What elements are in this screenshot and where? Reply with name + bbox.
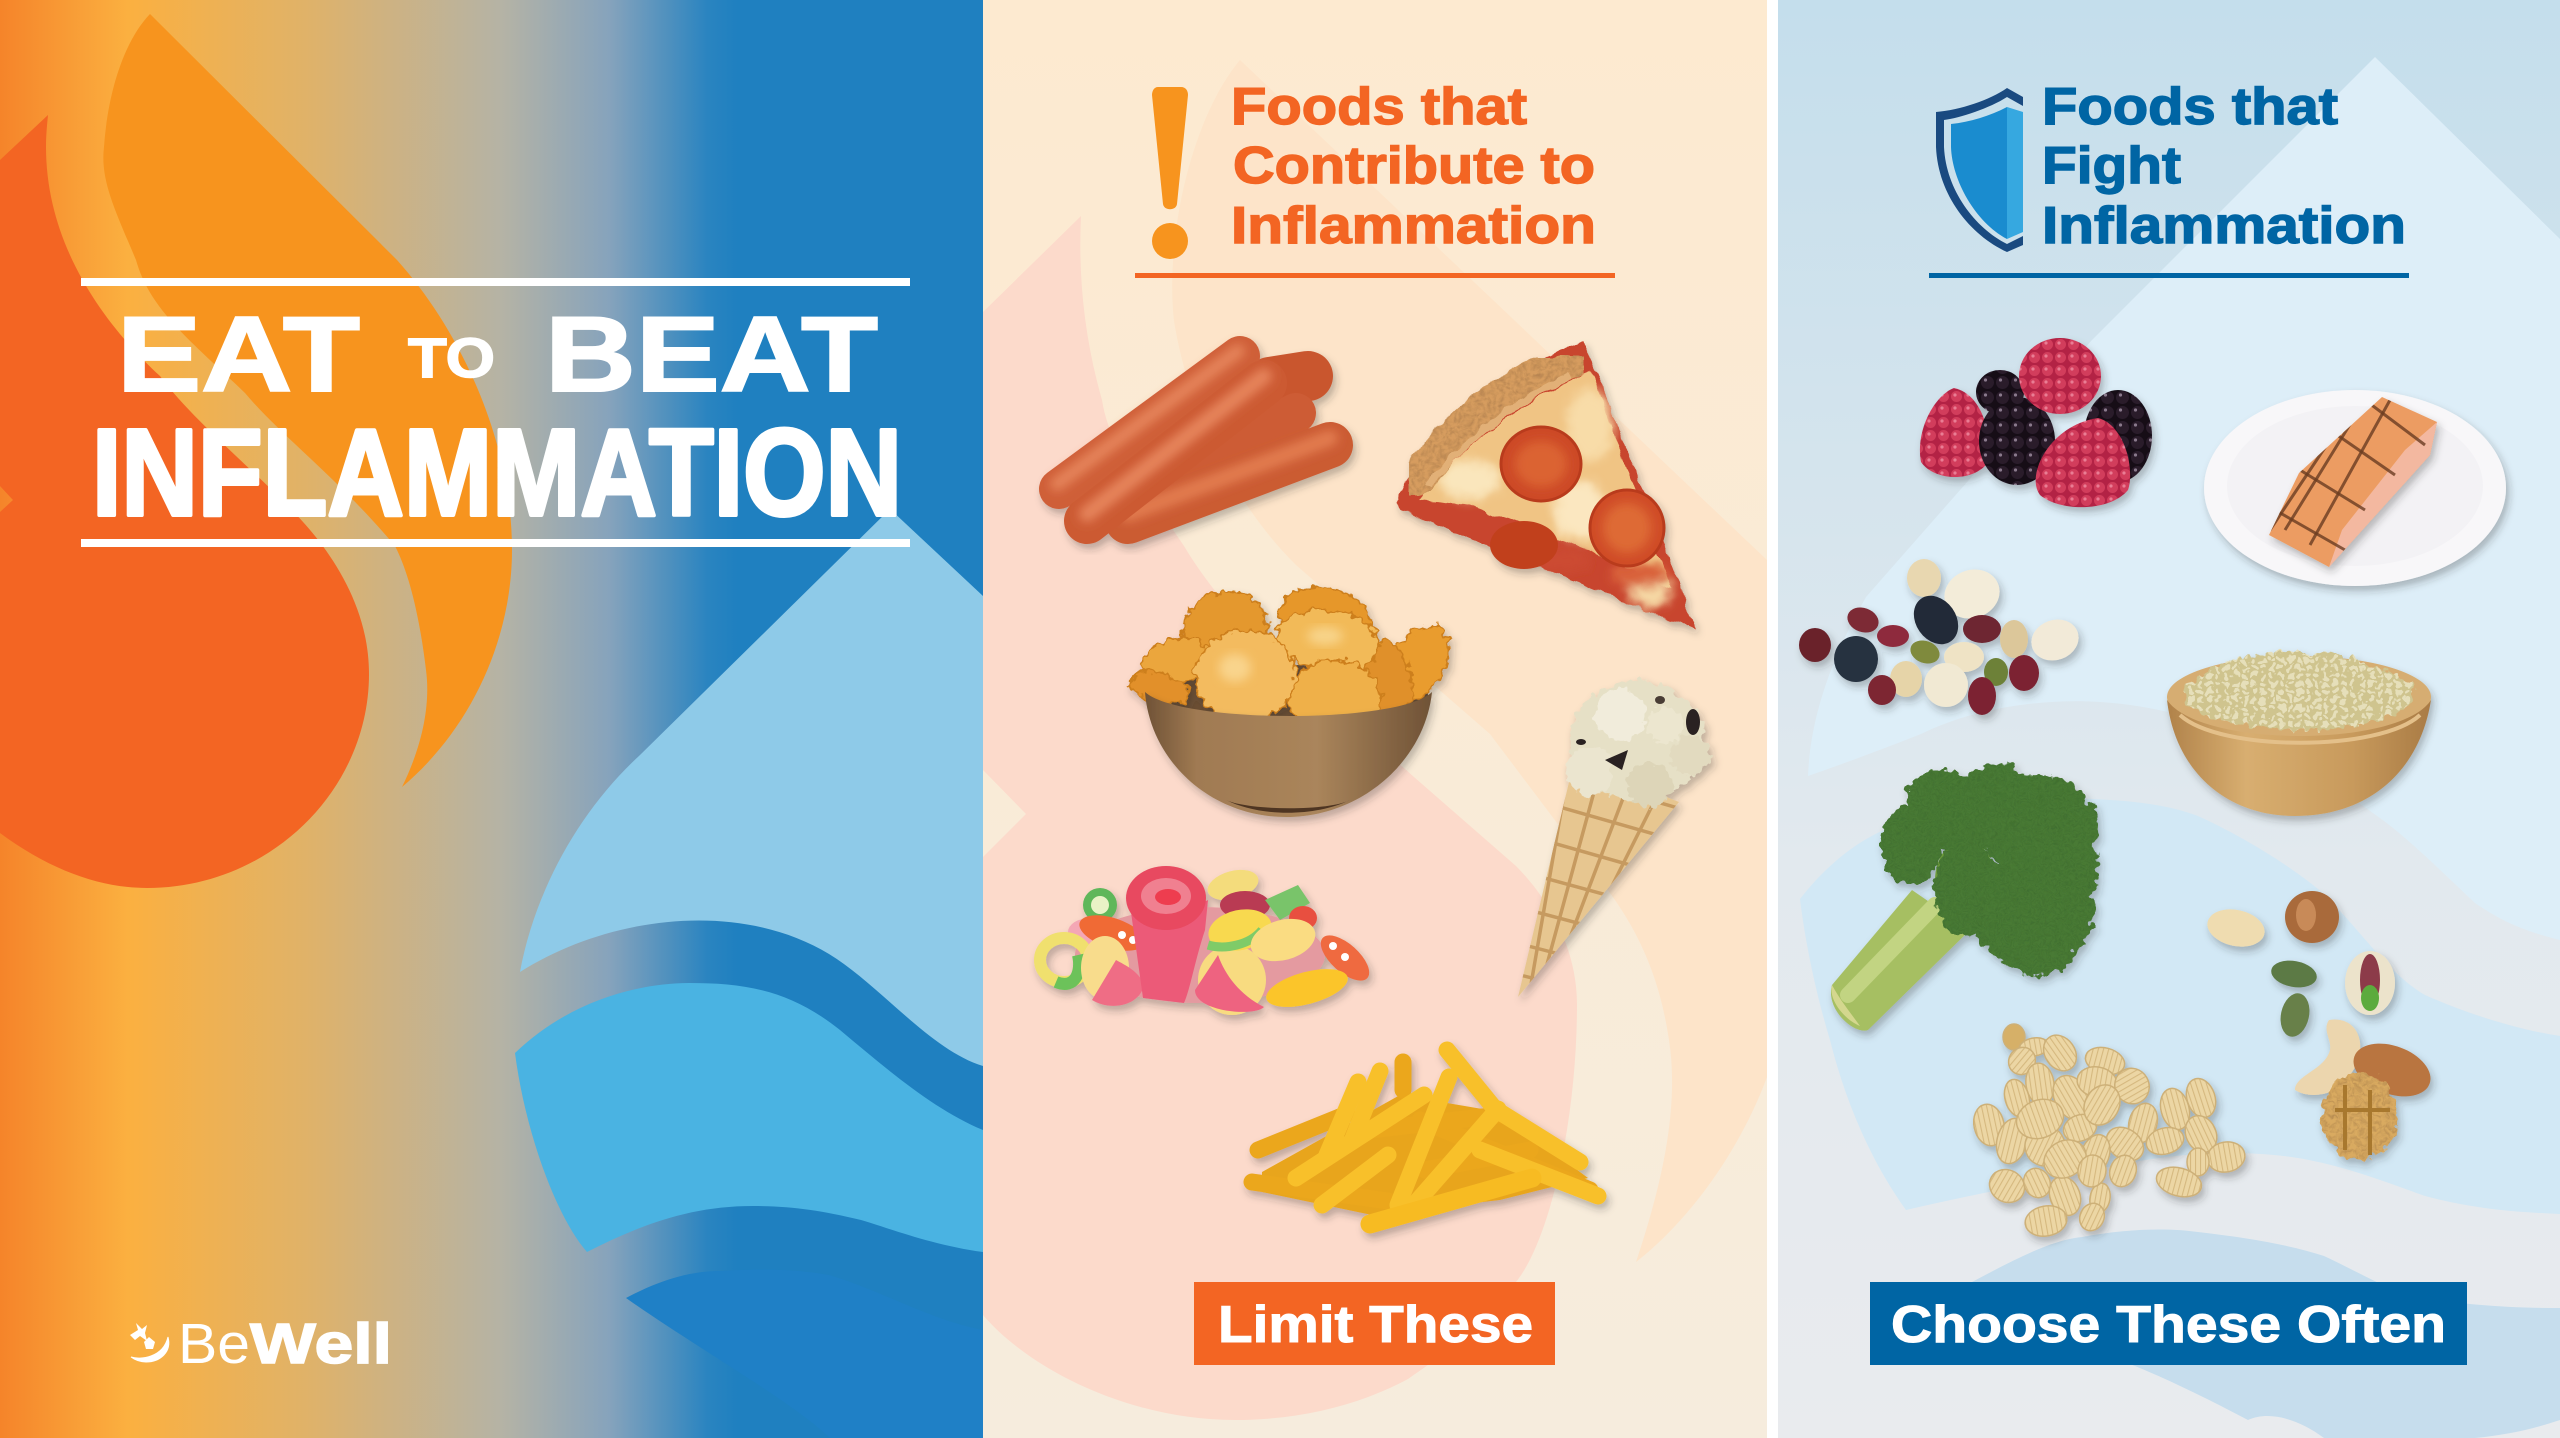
salmon fillet	[2269, 397, 2437, 567]
logo icon	[130, 1323, 169, 1362]
heading: foods that fight	[2042, 78, 2406, 255]
BeWell logo	[130, 1321, 388, 1364]
food: ice cream cone	[1500, 681, 1720, 1000]
heading: foods that fight: Fight	[2042, 137, 2181, 195]
food: broccoli	[1831, 764, 2099, 1031]
heading: foods that contribute: Contribute to	[1233, 137, 1595, 195]
food: gummy candy	[1040, 865, 1377, 1015]
panel: foods that fight inflammation	[1778, 0, 2560, 1438]
dark blue wave	[626, 1272, 715, 1356]
orange flame	[103, 14, 512, 787]
light blue wave backdrop	[1800, 797, 2560, 1214]
title word beat: BEAT	[545, 294, 878, 414]
food: salmon on plate	[2204, 390, 2506, 586]
panel: foods that contribute to inflammation	[983, 0, 1767, 1438]
heading: foods that fight: Inflammation	[2042, 197, 2406, 255]
icon: shield	[1936, 88, 2023, 252]
heading: foods that contribute	[1234, 86, 1594, 244]
food: hot dogs	[1057, 351, 1330, 521]
light blue water drop	[520, 509, 983, 1066]
broccoli florets	[1881, 764, 2099, 975]
label: limit these	[1194, 1282, 1555, 1365]
bottom blue wave backdrop	[1972, 1229, 2560, 1438]
panel: eat to beat title	[0, 0, 983, 1438]
pale orange flame backdrop	[1172, 60, 1767, 1262]
heading: foods that fight: Foods that	[2042, 78, 2338, 136]
bowl	[1145, 692, 1432, 817]
label: choose these often: Choose These Often	[1891, 1296, 2446, 1354]
food: berries	[1920, 338, 2152, 507]
food: french fries	[1252, 1050, 1598, 1224]
food: quinoa bowl	[2167, 652, 2431, 816]
logo wordmark well: Well	[250, 1312, 392, 1376]
food: beans	[1799, 559, 2084, 715]
mid blue wave	[515, 983, 983, 1252]
heading: foods that contribute: Foods that	[1231, 78, 1527, 136]
icon: exclamation mark	[1152, 87, 1188, 259]
logo wordmark be: Be	[178, 1312, 250, 1376]
red-orange flame	[0, 115, 369, 888]
title line one: EAT	[117, 294, 360, 414]
food: pizza slice	[1396, 340, 1697, 631]
ice cream scoop	[1566, 681, 1710, 807]
title line two: INFLAMMATION	[92, 405, 902, 542]
food: nuts and seeds	[2204, 891, 2438, 1160]
food: chips in bowl	[1127, 580, 1462, 817]
heading: foods that contribute: Inflammation	[1231, 197, 1596, 255]
pepperoni	[1490, 427, 1664, 569]
label: limit these: Limit These	[1218, 1296, 1533, 1354]
chips	[1127, 580, 1462, 736]
pale triangle backdrop	[1808, 57, 2560, 940]
label: choose these often	[1870, 1282, 2467, 1365]
red sour ribbon	[1126, 866, 1208, 1003]
title word to: TO	[408, 326, 495, 389]
title block	[81, 278, 910, 547]
pink flame backdrop	[983, 216, 1577, 1420]
food: oats	[1970, 1024, 2247, 1239]
